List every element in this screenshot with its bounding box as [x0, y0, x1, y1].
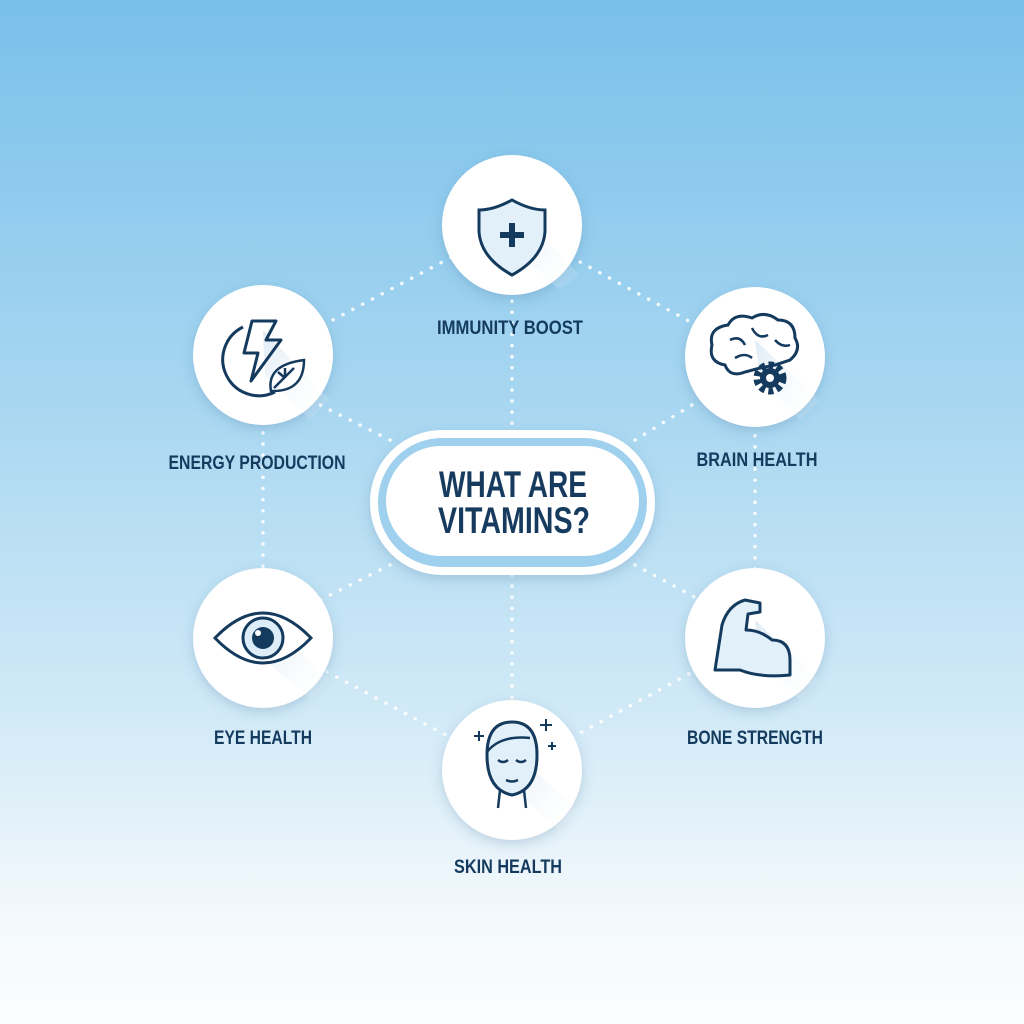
node: energy production [168, 285, 346, 474]
node: brain health: BRAIN HEALTH [696, 450, 818, 471]
node: skin health [442, 700, 582, 878]
center pill: What are vitamins: VITAMINS? [438, 500, 590, 541]
center pill: What are vitamins: WHAT ARE [439, 464, 587, 505]
node: eye health [193, 568, 333, 749]
node: immunity boost: IMMUNITY BOOST [437, 318, 583, 339]
node: energy production: ENERGY PRODUCTION [168, 453, 346, 474]
node: bone strength [685, 568, 825, 749]
node: eye health: EYE HEALTH [214, 728, 312, 749]
center pill: What are vitamins [370, 430, 655, 575]
node: brain health [685, 287, 825, 471]
node: bone strength: BONE STRENGTH [687, 728, 823, 749]
node: immunity boost [437, 155, 583, 339]
node: skin health: SKIN HEALTH [454, 857, 562, 878]
